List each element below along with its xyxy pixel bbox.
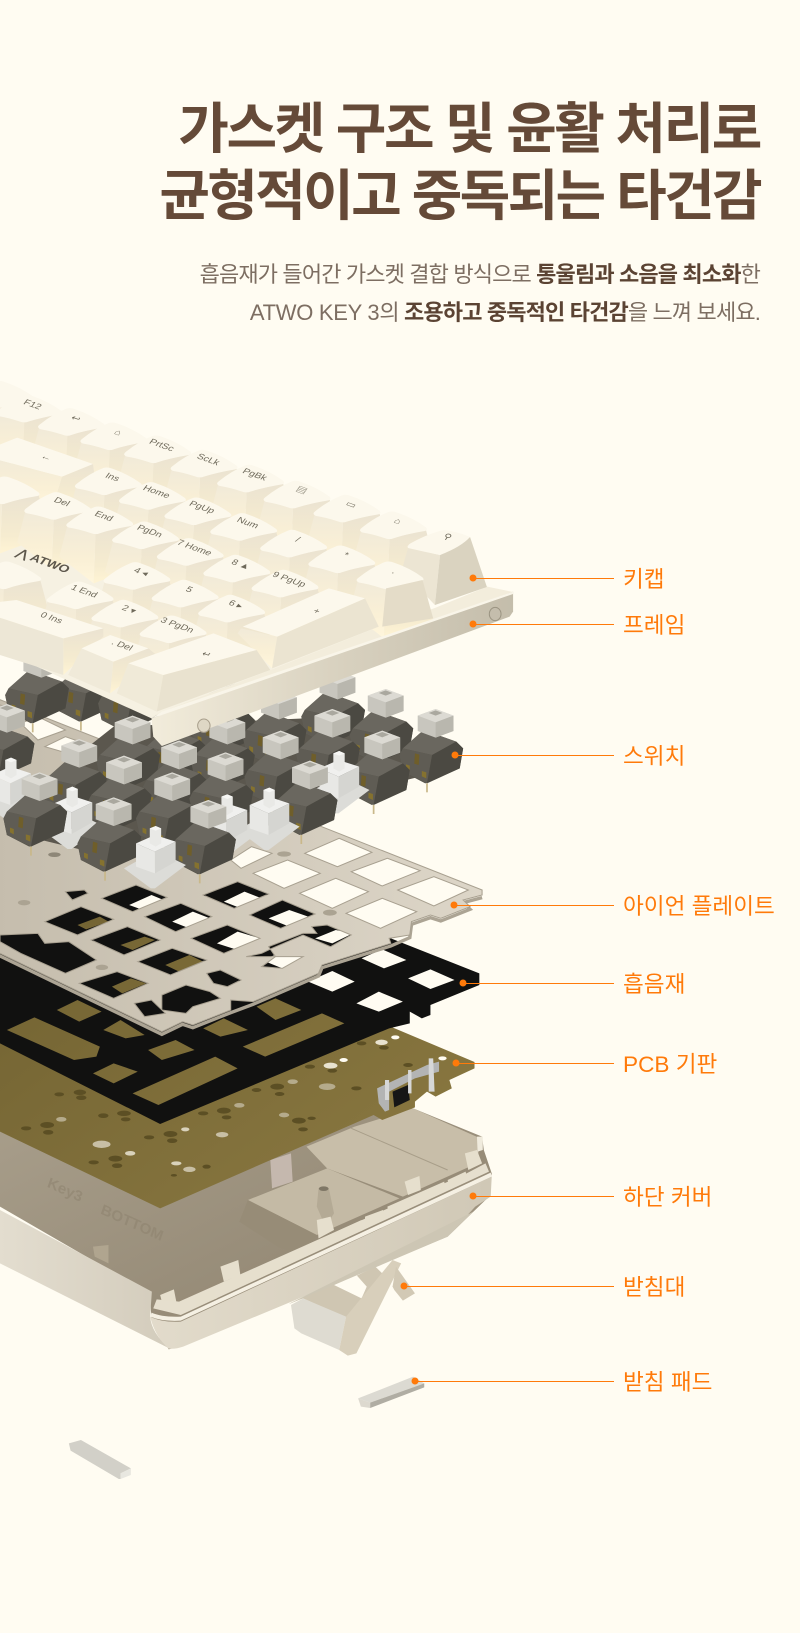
callout: foam: 흡음재 xyxy=(623,972,685,997)
subtitle text: ATWO KEY 3의 조용하고 중독적인 타건감을 느껴 보세요. xyxy=(250,300,760,325)
switches xyxy=(0,647,463,888)
key legends: ScLk xyxy=(195,451,222,467)
PCB board xyxy=(0,857,475,1208)
key legends: 0 Ins xyxy=(39,610,65,625)
key legends: * xyxy=(341,550,351,560)
key: plus xyxy=(238,588,379,668)
stabilizer and connector xyxy=(377,1058,439,1112)
key legends: 5 xyxy=(184,584,195,594)
key legends: . xyxy=(390,566,399,575)
key legends: End xyxy=(93,509,116,523)
callout: keycap: 키캡 xyxy=(623,567,665,592)
callout: stand pad: 받침 패드 xyxy=(623,1370,712,1395)
title: 가스켓 구조 및 윤활 처리로 xyxy=(178,98,761,160)
subtitle text: 흡음재가 들어간 가스켓 결합 방식으로 통울림과 소음을 최소화한 xyxy=(200,262,761,287)
key legends: . Del xyxy=(110,637,135,652)
key legends: ⚲ xyxy=(441,531,454,542)
bottom case xyxy=(0,1108,492,1349)
key legends: 8 ▲ xyxy=(230,557,253,571)
key legends: 4 ◂ xyxy=(132,565,151,578)
foam damping layer xyxy=(0,783,479,1124)
callout: stand pad xyxy=(412,1370,712,1395)
key legends: / xyxy=(294,535,303,544)
key legends: 6 ▸ xyxy=(227,598,246,611)
key: numpad dot xyxy=(350,561,433,638)
title xyxy=(159,98,762,227)
callout: frame xyxy=(470,613,685,638)
frame xyxy=(0,530,513,718)
frame front face xyxy=(152,592,513,746)
tilt stand xyxy=(289,1260,415,1356)
callout: bottom cover xyxy=(470,1185,712,1210)
embossed bottom marking xyxy=(45,1175,165,1245)
ATWO logo: ⋀ ATWO xyxy=(13,546,73,576)
exploded keyboard illustration xyxy=(0,381,513,1479)
key legends xyxy=(22,397,454,660)
callout: stand xyxy=(400,1275,685,1300)
key legends: ⌂ xyxy=(392,516,404,526)
callout: PCB: PCB 기판 xyxy=(623,1052,717,1077)
key legends: F12 xyxy=(22,397,44,411)
key legends: 2 ▾ xyxy=(120,603,139,616)
keycaps xyxy=(0,381,487,712)
key legends: ⌂ xyxy=(112,427,124,437)
key: search xyxy=(402,530,487,605)
callout: stand: 받침대 xyxy=(623,1275,685,1300)
key legends: PgBk xyxy=(241,466,270,482)
key legends: + xyxy=(311,606,323,616)
embossed bottom marking: Key3 xyxy=(45,1175,85,1206)
callout: frame: 프레임 xyxy=(623,613,685,638)
key legends: PgDn xyxy=(135,522,165,539)
subtitle text xyxy=(200,262,761,325)
callout: PCB xyxy=(452,1052,717,1077)
key legends: ↵ xyxy=(200,649,214,660)
key legends: Del xyxy=(52,495,72,508)
key legends: Home xyxy=(141,483,173,500)
key legends: 7 Home xyxy=(175,537,214,557)
key legends: 9 PgUp xyxy=(271,569,308,589)
key legends: PgUp xyxy=(187,498,217,515)
callout: iron plate: 아이언 플레이트 xyxy=(623,894,775,919)
key: zero xyxy=(0,600,103,675)
key legends: 3 PgDn xyxy=(159,615,196,634)
iron plate xyxy=(0,698,482,1034)
embossed bottom marking: BOTTOM xyxy=(99,1201,165,1245)
key legends: ↩ xyxy=(69,413,83,424)
key legends: ▤ xyxy=(294,484,309,496)
key legends: ▭ xyxy=(344,498,359,510)
key: enter xyxy=(117,633,270,712)
callout: bottom cover: 하단 커버 xyxy=(623,1185,712,1210)
key legends: Num xyxy=(235,515,261,530)
key: decimal point xyxy=(68,635,158,693)
callout: switch xyxy=(452,744,685,769)
title: 균형적이고 중독되는 타건감 xyxy=(159,165,762,227)
key legends: 1 End xyxy=(69,582,100,599)
key legends: PrtSc xyxy=(147,436,177,453)
callout: iron plate xyxy=(450,894,775,919)
key: backspace xyxy=(0,438,96,510)
callout: foam xyxy=(460,972,685,997)
callout: keycap xyxy=(470,567,665,592)
key legends: ← xyxy=(39,451,54,463)
rubber pads xyxy=(69,1377,424,1479)
key legends: Ins xyxy=(103,470,122,483)
callout: switch: 스위치 xyxy=(623,744,685,769)
